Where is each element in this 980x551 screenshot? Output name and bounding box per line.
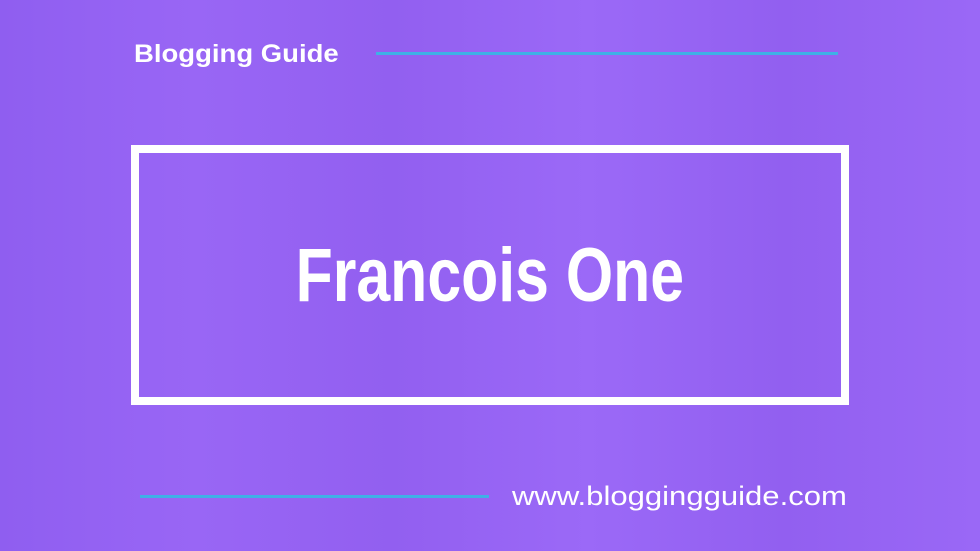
title frame xyxy=(131,145,849,405)
heading: brand: Blogging Guide xyxy=(134,40,339,68)
website url: www.bloggingguide.com xyxy=(512,481,847,511)
title: Francois One xyxy=(296,232,684,318)
bottom accent line xyxy=(140,495,489,498)
top accent line xyxy=(376,52,838,55)
